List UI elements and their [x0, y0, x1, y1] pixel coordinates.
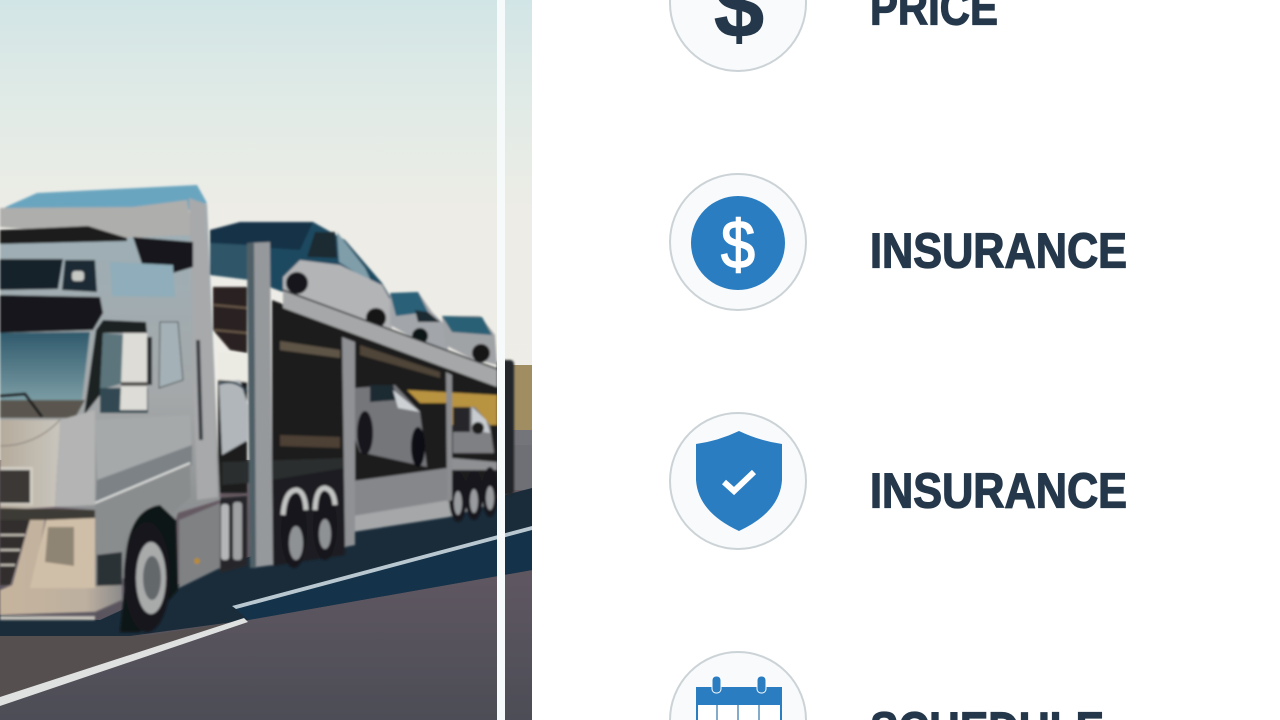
cab lower door [95, 415, 192, 495]
lower deck car 2 [453, 407, 494, 453]
inclined upper deck [283, 290, 497, 387]
icon: calendar [670, 652, 806, 720]
front wheel [120, 505, 178, 632]
lower deck car behind cab [219, 380, 248, 455]
item: insurance (dollar) [670, 174, 1127, 310]
icon: shield with check [670, 413, 806, 549]
white vertical divider [497, 0, 505, 720]
roof fairing [0, 185, 207, 210]
panel: white list [532, 0, 1280, 720]
rear cab wheels [220, 496, 247, 573]
cab windows and visor [0, 259, 63, 290]
upper deck car 1 [210, 222, 392, 330]
truck front panel [0, 420, 60, 510]
lower trailer deck [346, 468, 449, 517]
photo background: sky and road [0, 0, 532, 720]
headlight [30, 518, 95, 588]
lower deck car 1 [355, 385, 427, 467]
icon: blue dollar coin: $ [721, 207, 755, 283]
icon: dollar sign [670, 0, 806, 71]
wind deflector mirror [133, 237, 193, 273]
sky through trailer [218, 352, 247, 382]
item: schedule [670, 652, 1104, 720]
side mirror [100, 333, 152, 413]
trailer wheels [281, 467, 498, 568]
cab main body [0, 203, 220, 590]
upper deck car 3 [442, 316, 497, 365]
background seen through trailer [407, 385, 497, 430]
icon: blue dollar coin [670, 174, 806, 310]
upper deck car 2 [390, 292, 448, 352]
front bumper [0, 520, 122, 615]
car carrier interior [272, 300, 497, 560]
grille [0, 467, 33, 505]
truck cab [0, 185, 220, 632]
item: insurance (shield) [670, 413, 1127, 549]
heading: INSURANCE: INSURANCE [870, 224, 1127, 278]
truck and trailer illustration [0, 185, 514, 632]
trailer posts [247, 242, 452, 568]
heading: INSURANCE: INSURANCE [870, 464, 1127, 518]
panel: photo of car carrier truck on highway [0, 0, 532, 720]
side skirt [179, 503, 220, 588]
road lane markings [0, 526, 532, 706]
item: price [670, 0, 998, 71]
rear trailer end [497, 360, 514, 495]
